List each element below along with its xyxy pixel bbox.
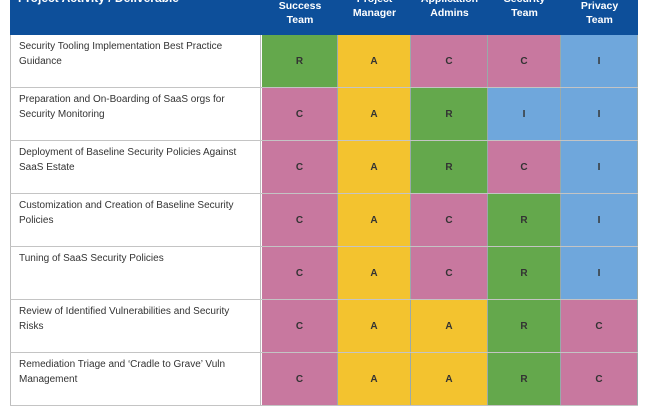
header: privacy team: Privacy — [581, 0, 618, 12]
row 6: R — [520, 320, 528, 332]
header: success team — [279, 0, 321, 26]
row 5: R — [520, 268, 528, 278]
row 5: Tuning of SaaS Security Policies — [19, 253, 164, 264]
header: project manager: Manager — [353, 7, 396, 19]
row 1: I — [598, 56, 600, 66]
row 7: A — [445, 374, 453, 384]
header: security team — [504, 0, 545, 19]
header: app admins — [421, 0, 478, 19]
row 4: Customization and Creation of Baseline Security Policies — [19, 200, 234, 226]
row 6: Review of Identified Vulnerabilities and Security Risks — [19, 306, 229, 332]
row 7: C — [595, 374, 603, 384]
header: success team: Success — [279, 0, 321, 12]
row 2: A — [370, 108, 378, 120]
header: success team: Team — [287, 14, 313, 26]
row 1 — [10, 35, 638, 88]
row 5: A — [370, 268, 378, 278]
row 6 — [10, 300, 638, 353]
row 2: C — [296, 108, 303, 120]
row 7: R — [520, 374, 528, 384]
row 3: I — [598, 162, 600, 172]
header bar — [10, 0, 638, 35]
row 7: C — [296, 374, 303, 384]
row 1: Security Tooling Implementation Best Practice Guidance — [19, 41, 222, 67]
row 6: C — [595, 320, 603, 332]
row 3 — [10, 141, 638, 194]
row 4: C — [296, 214, 303, 226]
row 7: Remediation Triage and ‘Cradle to Grave’ Vuln Management — [19, 359, 225, 385]
row 2: I — [523, 108, 525, 120]
header: project manager — [353, 0, 396, 19]
header: privacy team — [581, 0, 618, 26]
row 1: C — [445, 56, 453, 66]
header: privacy team: Team — [586, 14, 613, 26]
row 5: I — [598, 268, 600, 278]
row 1: R — [296, 56, 303, 66]
row 1: A — [370, 56, 378, 66]
header: security team: Team — [511, 7, 538, 19]
row 6: A — [370, 320, 378, 332]
row 6: C — [296, 320, 303, 332]
row 4 — [10, 194, 638, 247]
row 1: C — [520, 56, 528, 66]
row 5: C — [296, 268, 303, 278]
row 3: C — [296, 162, 303, 172]
row 3: A — [370, 162, 378, 172]
row 2: Preparation and On-Boarding of SaaS orgs for Security Monitoring — [19, 94, 225, 120]
header: app admins: Admins — [430, 7, 469, 19]
row 3: Deployment of Baseline Security Policies Against SaaS Estate — [19, 147, 236, 173]
row 2: I — [598, 108, 600, 120]
row 7 — [10, 353, 638, 406]
row 7: A — [370, 374, 378, 384]
row 6: A — [445, 320, 453, 332]
row 2: R — [445, 108, 453, 120]
row 5 — [10, 247, 638, 300]
row 3: R — [445, 162, 453, 172]
row 4: R — [520, 214, 528, 226]
row 4: C — [445, 214, 453, 226]
row 4: A — [370, 214, 378, 226]
row 4: I — [598, 214, 600, 226]
row 2 — [10, 88, 638, 141]
row 5: C — [445, 268, 453, 278]
row 3: C — [520, 162, 528, 172]
